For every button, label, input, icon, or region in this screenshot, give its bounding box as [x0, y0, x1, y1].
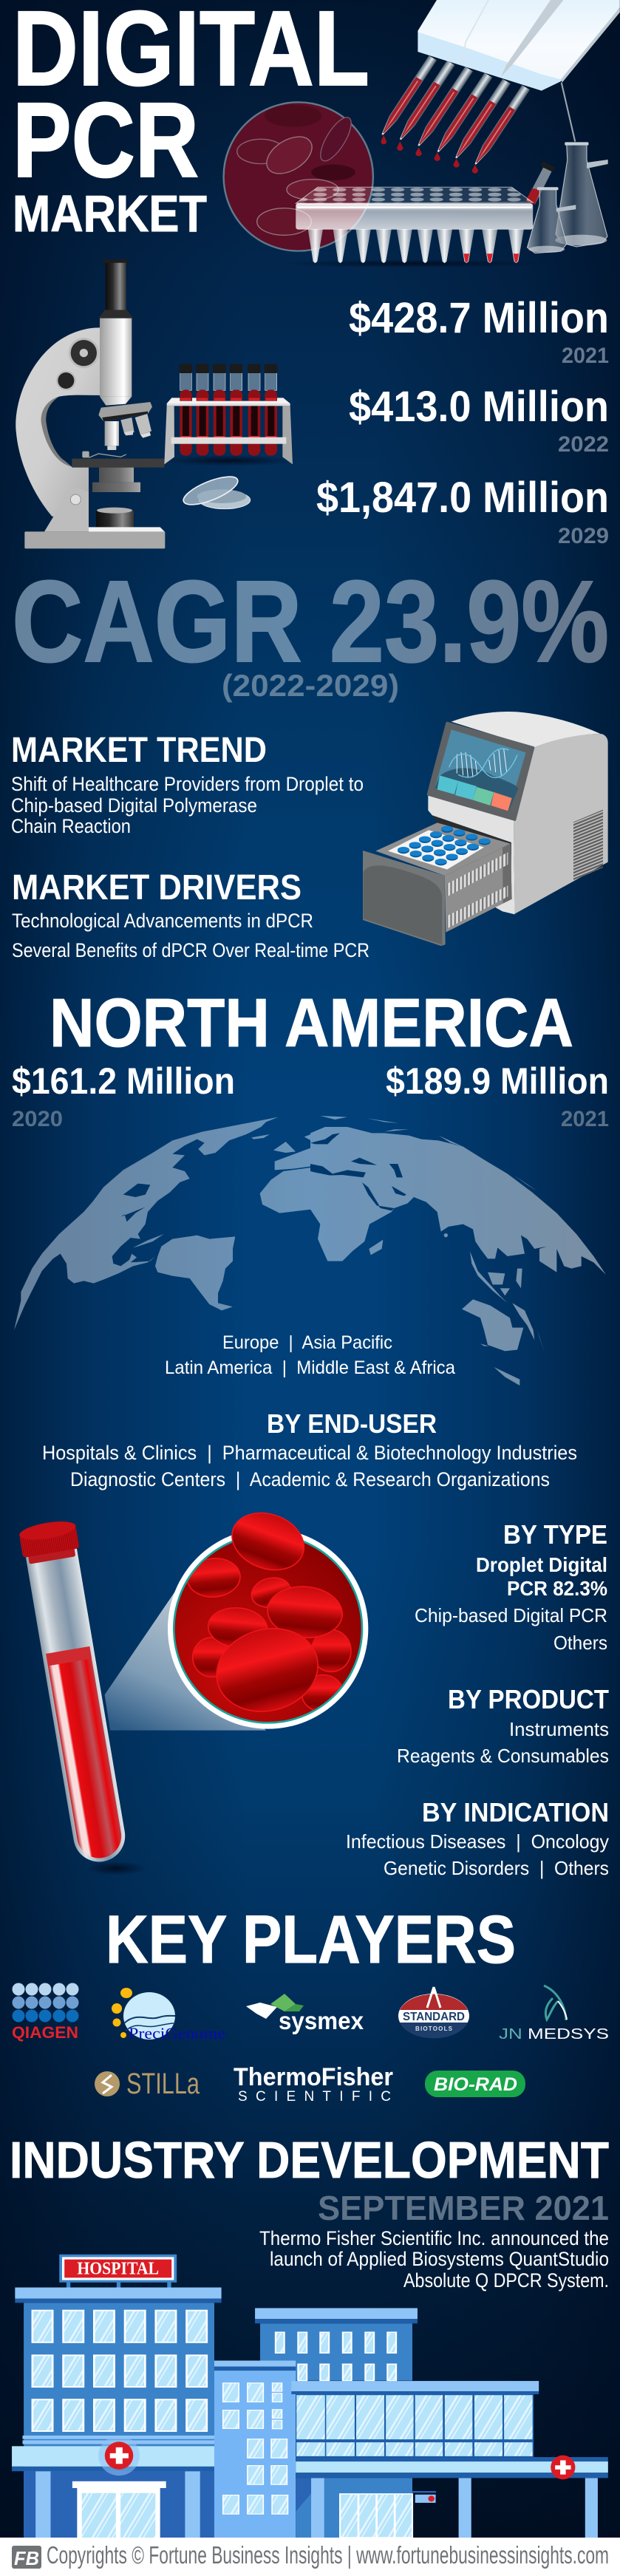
illustration: test tube rack	[163, 364, 296, 466]
illustration: flasks and sample tube	[526, 83, 608, 253]
logo: sysmex	[246, 1994, 364, 2034]
footer: FB	[14, 2547, 39, 2569]
date heading: SEPTEMBER 2021	[318, 2189, 609, 2227]
by type: Chip-based Digital PCR	[415, 1604, 607, 1626]
logo: QIAGEN: QIAGEN	[12, 2023, 78, 2042]
logo: Thermo Fisher Scientific: ThermoFisher	[234, 2063, 393, 2091]
illustration: blood cell lens	[224, 102, 373, 251]
logo: Thermo Fisher Scientific	[234, 2063, 393, 2105]
north america heading: 2021	[561, 1107, 609, 1131]
title: MARKET	[13, 185, 207, 242]
magnifier cone	[105, 1587, 266, 1731]
footer	[0, 2538, 620, 2576]
market drivers: Technological Advancements in dPCR	[12, 910, 313, 932]
market drivers	[12, 868, 369, 961]
illustration: multichannel pipette	[378, 0, 620, 174]
north america heading: NORTH AMERICA	[50, 984, 573, 1061]
by indication: Genetic Disorders | Others	[384, 1857, 609, 1879]
logo: Stilla: STILLa	[126, 2068, 200, 2100]
by type: Others	[553, 1632, 607, 1654]
market trend: Chip-based Digital Polymerase	[11, 794, 257, 817]
by end-user	[42, 1408, 577, 1490]
by type: PCR 82.3%	[507, 1577, 607, 1600]
by type: Droplet Digital	[476, 1553, 607, 1576]
regions list: Europe | Asia Pacific	[222, 1332, 392, 1353]
by type: BY TYPE	[503, 1519, 607, 1550]
market trend: MARKET TREND	[11, 731, 267, 770]
logo: Bio-Rad	[425, 2071, 525, 2097]
market size figures: 2022	[558, 432, 609, 457]
glass wing	[291, 2381, 608, 2538]
north america heading: $189.9 Million	[386, 1060, 609, 1102]
by indication: Infectious Diseases | Oncology	[346, 1830, 609, 1853]
middle block	[214, 2361, 296, 2538]
by end-user: BY END-USER	[267, 1408, 437, 1439]
logo: Standard Biotools	[398, 1987, 469, 2038]
by end-user: Diagnostic Centers | Academic & Research Organizations	[70, 1468, 550, 1490]
by end-user: Hospitals & Clinics | Pharmaceutical & Biotechnology Industries	[42, 1442, 577, 1464]
title	[13, 0, 369, 242]
market trend: Shift of Healthcare Providers from Droplet to	[11, 773, 364, 795]
blood test tube	[18, 1518, 132, 1866]
by indication	[346, 1797, 609, 1879]
market size figures	[316, 294, 609, 548]
red blood cells circle	[168, 1503, 368, 1729]
CAGR heading: (2022-2029)	[222, 668, 399, 703]
north america heading: $161.2 Million	[12, 1060, 235, 1102]
north america heading	[12, 984, 609, 1131]
logo: PreciGenome: PreciGenome	[129, 2024, 225, 2042]
logo: PreciGenome	[112, 1988, 225, 2042]
globe: americas and western europe	[14, 1117, 311, 1330]
logo: JN Medsys: JN MEDSYS	[499, 2026, 609, 2042]
by product: Reagents & Consumables	[397, 1745, 609, 1767]
market size figures: 2021	[562, 344, 609, 368]
by indication: BY INDICATION	[422, 1797, 609, 1827]
logo: Bio-Rad: BIO-RAD	[434, 2074, 517, 2095]
market size figures: $428.7 Million	[349, 294, 609, 342]
illustration: world globe	[14, 1116, 606, 1386]
market drivers: MARKET DRIVERS	[12, 868, 302, 907]
by product	[397, 1684, 609, 1767]
logo: Thermo Fisher Scientific: SCIENTIFIC	[238, 2089, 391, 2105]
regions list	[165, 1332, 455, 1378]
north america heading: 2020	[12, 1107, 63, 1131]
illustration: petri dish	[180, 471, 251, 510]
market trend	[11, 731, 364, 837]
market drivers: Several Benefits of dPCR Over Real-time PCR	[12, 939, 369, 961]
logo: Standard Biotools: BIOTOOLS	[415, 2025, 453, 2032]
rear block	[255, 2308, 418, 2381]
illustration: hospital	[12, 2255, 608, 2538]
title: PCR	[13, 81, 199, 200]
development text	[259, 2227, 609, 2292]
main tower	[12, 2288, 228, 2538]
by product: BY PRODUCT	[448, 1684, 609, 1714]
logo: QIAGEN	[12, 1983, 78, 2042]
logo: sysmex: sysmex	[279, 2007, 364, 2034]
logo: JN Medsys	[499, 1986, 609, 2042]
illustration: microscope	[16, 259, 165, 548]
logo: Stilla	[95, 2068, 200, 2100]
by product: Instruments	[509, 1718, 609, 1740]
market trend: Chain Reaction	[11, 815, 131, 837]
by type	[415, 1519, 607, 1654]
illustration: 96-well plate	[279, 187, 548, 268]
key players heading: KEY PLAYERS	[106, 1902, 516, 1977]
globe: africa, asia and oceania	[310, 1116, 606, 1386]
tube shadow	[85, 1861, 146, 1875]
regions list: Latin America | Middle East & Africa	[165, 1357, 455, 1378]
logo: Standard Biotools: STANDARD	[403, 2011, 465, 2023]
illustration: hospital: HOSPITAL	[77, 2259, 159, 2278]
illustration: tube and blood cell magnifier	[18, 1503, 368, 1875]
market size figures: 2029	[558, 524, 609, 548]
market size figures: $413.0 Million	[349, 383, 609, 431]
illustration: PCR machine	[363, 712, 608, 946]
